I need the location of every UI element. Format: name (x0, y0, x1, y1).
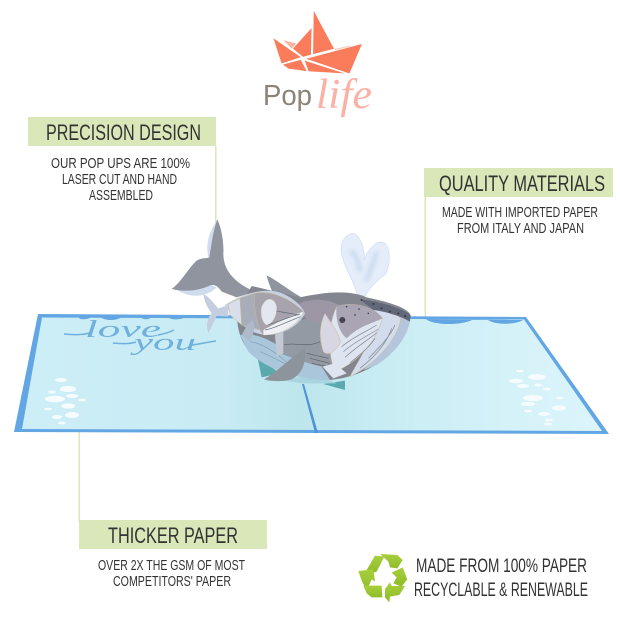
centre fold (302, 384, 318, 433)
body flank (277, 319, 333, 368)
leader line: thicker paper (78, 432, 80, 522)
icon: recycling symbol (358, 554, 407, 602)
lower jaw panel (323, 363, 347, 378)
description: OUR POP UPS ARE 100% (51, 156, 190, 172)
label bar (79, 520, 267, 549)
description: COMPETITORS' PAPER (113, 574, 231, 590)
description (51, 156, 190, 204)
tail fluke (172, 219, 255, 297)
icon: origami boat (273, 9, 363, 74)
large fin (264, 347, 305, 381)
description (98, 558, 245, 590)
baby whale tail (203, 294, 228, 333)
text: love you: love (85, 317, 162, 343)
teal stand left (257, 357, 280, 377)
logo word: life: life (316, 72, 372, 118)
label bar (28, 117, 216, 146)
belly blue (240, 334, 330, 380)
description: LASER CUT AND HAND (62, 172, 177, 188)
heading: PRECISION DESIGN (46, 120, 201, 145)
bubbles right (509, 370, 566, 425)
water scallops (42, 317, 523, 324)
dorsal fin (267, 275, 302, 297)
logo: Poplife (263, 9, 372, 118)
pectoral flipper front (320, 313, 340, 354)
head layers (330, 299, 411, 377)
panel: precision design (28, 117, 216, 204)
bubbles left (44, 378, 86, 424)
panel: thicker paper (79, 520, 267, 590)
text: love you: you (130, 330, 196, 356)
description: ASSEMBLED (89, 188, 153, 204)
baby whale body (225, 291, 305, 335)
leader line: quality materials (424, 197, 426, 319)
card pages (22, 318, 602, 431)
card blue base (14, 314, 609, 434)
pop-up card (14, 314, 609, 434)
body back (237, 286, 410, 380)
strip under whale (265, 377, 337, 383)
tail back layer (177, 220, 223, 296)
leader line: precision design (215, 146, 217, 226)
teal stand right (323, 381, 345, 390)
heading: THICKER PAPER (108, 523, 238, 548)
panel: quality materials (424, 168, 613, 237)
spout (341, 234, 389, 296)
description (442, 205, 598, 237)
description: OVER 2X THE GSM OF MOST (98, 558, 245, 574)
label bar (424, 168, 613, 197)
text: love you (64, 317, 216, 356)
illustration: paper whale (172, 219, 411, 390)
logo word: Pop: Pop (263, 80, 312, 112)
text: made from 100% paper (414, 555, 588, 601)
